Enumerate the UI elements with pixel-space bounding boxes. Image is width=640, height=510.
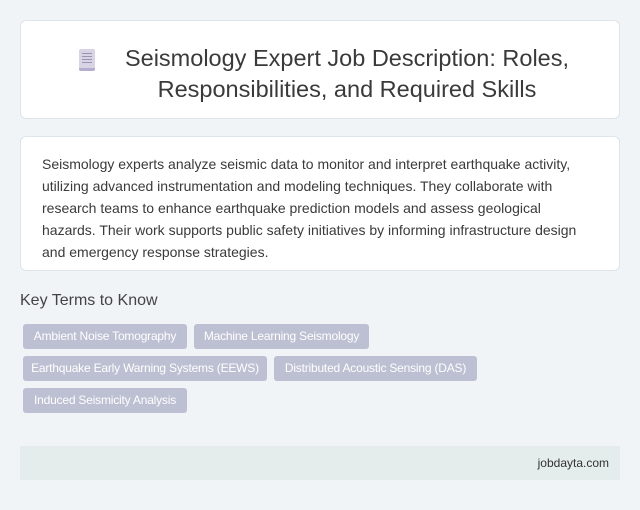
footer — [20, 446, 620, 480]
tags: Induced Seismicity Analysis — [34, 393, 176, 407]
tags: Machine Learning Seismology — [204, 329, 359, 343]
description card — [20, 136, 620, 271]
footer: jobdayta.com — [538, 456, 609, 470]
tags: Distributed Acoustic Sensing (DAS) — [285, 361, 466, 375]
header card — [20, 20, 620, 119]
description card: Seismology experts analyze seismic data to monitor and interpret earthquake activity, utilizing advanced instrumentation and modeling techniques. They collaborate with research teams to enhance earthquake prediction models and assess geological hazards. Their work supports public safety initiatives by informing infrastructure design and emergency response strategies. — [42, 156, 576, 260]
tags: Earthquake Early Warning Systems (EEWS) — [31, 361, 259, 375]
title: Seismology Expert Job Description: Roles, Responsibilities, and Required Skills — [125, 45, 569, 102]
heading: key terms: Key Terms to Know — [20, 292, 158, 309]
icon: document — [79, 49, 95, 71]
tags: Ambient Noise Tomography — [34, 329, 176, 343]
